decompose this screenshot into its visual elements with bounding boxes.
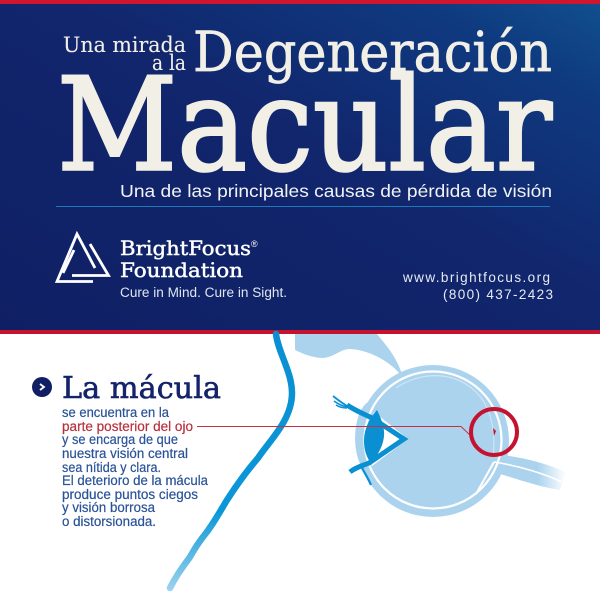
eye diagram — [197, 334, 566, 517]
bottom red band — [0, 330, 600, 334]
macula mark — [493, 428, 496, 436]
body text: parte posterior del ojo — [62, 419, 193, 434]
lens and iris — [364, 410, 384, 463]
bullet icon — [32, 377, 52, 397]
body text: sea nítida y clara. — [62, 460, 161, 475]
face profile line — [170, 334, 292, 588]
title: Degeneración — [193, 20, 552, 84]
contact details: www.brightfocus.org — [402, 270, 550, 285]
white gap between nerve and eyeball — [476, 462, 494, 494]
title: Una mirada — [63, 33, 186, 57]
highlight circle — [471, 409, 517, 455]
white eyeball ring — [364, 372, 502, 508]
eyelids and lashes — [333, 396, 404, 485]
contact details: (800) 437-2423 — [443, 287, 553, 302]
optic nerve — [496, 455, 566, 490]
title: a la — [152, 51, 186, 75]
top red band — [0, 0, 600, 4]
body text: y se encarga de que — [62, 432, 178, 447]
white wedge behind lens — [366, 412, 408, 466]
logo wordmark: BrightFocus — [120, 237, 251, 260]
logo wordmark: Cure in Mind. Cure in Sight. — [120, 285, 287, 300]
body text: y visión borrosa — [62, 500, 155, 515]
cornea bulge — [355, 400, 393, 476]
header banner background — [0, 0, 600, 333]
contact details — [402, 270, 553, 302]
body text: produce puntos ciegos — [62, 487, 198, 502]
body text: se encuentra en la — [62, 405, 169, 420]
logo wordmark: ® — [251, 239, 258, 249]
brow and nose shape — [295, 334, 402, 374]
subtitle: Una de las principales causas de pérdida de visión — [120, 181, 552, 201]
section heading: La mácula — [62, 371, 221, 406]
optic nerve white line — [494, 462, 562, 482]
body text — [62, 405, 208, 529]
body text: o distorsionada. — [62, 514, 156, 529]
logo wordmark: Foundation — [120, 259, 243, 282]
title: Macular — [57, 52, 553, 200]
body text: nuestra visión central — [62, 446, 188, 461]
logo wordmark — [120, 237, 287, 300]
body text: El deterioro de la mácula — [62, 473, 208, 488]
outer eyeball — [357, 365, 509, 517]
inner retina line — [396, 376, 494, 456]
logo: BrightFocus triangle — [57, 234, 108, 282]
pointer line — [197, 426, 470, 435]
divider line — [56, 206, 550, 207]
